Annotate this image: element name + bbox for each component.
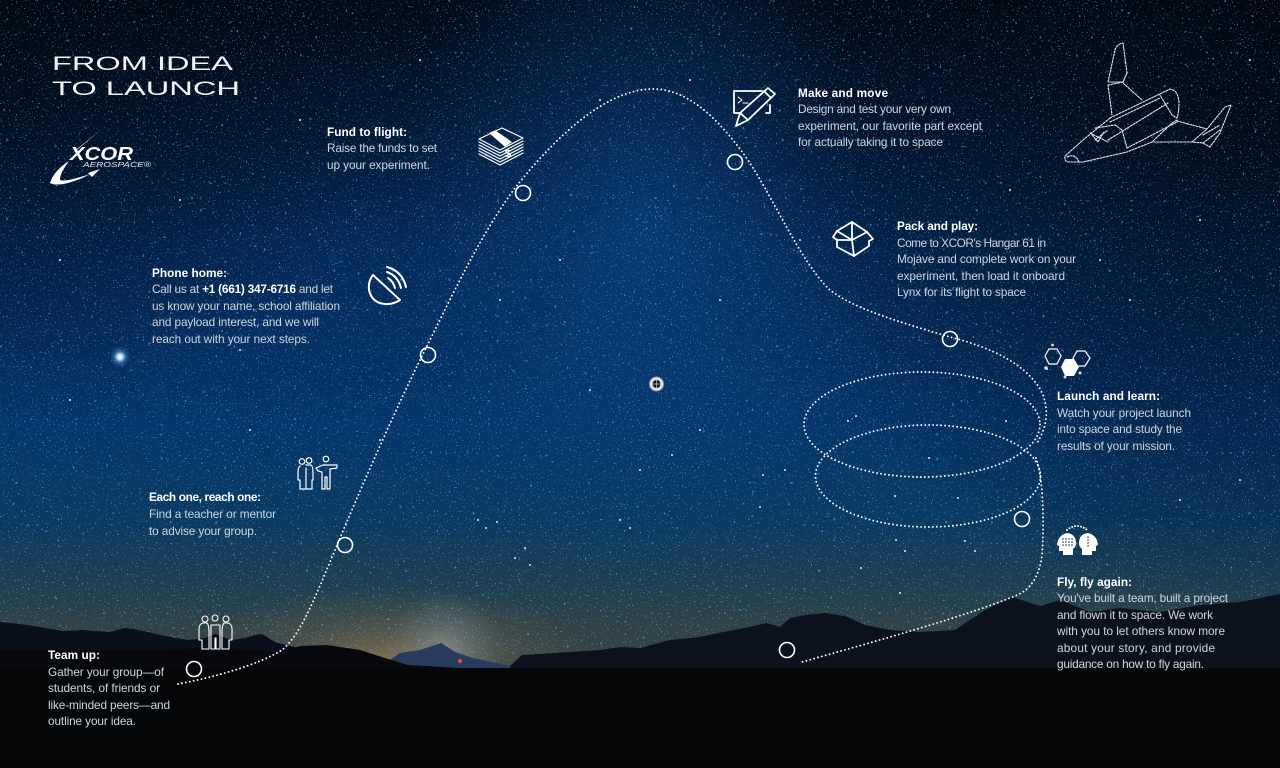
step: make and move	[734, 86, 983, 149]
icon: team	[199, 615, 232, 649]
icon: molecules	[1044, 344, 1090, 378]
icon: satellite dish	[369, 267, 406, 304]
icon: money stack: $	[505, 148, 511, 160]
text	[48, 665, 170, 728]
heading: Pack and play:	[897, 219, 978, 233]
text: about your story, and provide	[1057, 641, 1215, 655]
heading: Each one, reach one:	[149, 490, 261, 504]
step: phone home	[152, 266, 406, 346]
text	[327, 141, 438, 172]
text: Lynx for its flight to space	[897, 285, 1026, 299]
heading: Fund to flight:	[327, 125, 407, 139]
mountains	[0, 594, 1280, 768]
step: team up	[48, 615, 232, 728]
text: Come to XCOR's Hangar 61 in	[897, 236, 1046, 250]
logo: XCOR Aerospace	[50, 128, 152, 185]
text: Raise the funds to set	[327, 141, 438, 155]
heading: Make and move	[798, 86, 888, 100]
step: each one, reach one	[149, 456, 337, 538]
text: experiment, our favorite part except	[798, 119, 983, 133]
text: experiment, then load it onboard	[897, 269, 1065, 283]
step markers	[186, 154, 1030, 676]
step: fund to flight	[327, 125, 523, 172]
text: with you to let others know more	[1056, 624, 1225, 638]
text: results of your mission.	[1057, 439, 1175, 453]
logo: XCOR Aerospace: AEROSPACE®	[82, 161, 152, 169]
text: guidance on how to fly again.	[1057, 657, 1204, 671]
text: Mojave and complete work on your	[897, 252, 1076, 266]
text: reach out with your next steps.	[152, 332, 310, 346]
bright star	[109, 346, 131, 368]
text	[798, 102, 983, 149]
text: Find a teacher or mentor	[149, 507, 276, 521]
text: like-minded peers—and	[48, 698, 170, 712]
icon: two heads	[1057, 526, 1098, 555]
text: Watch your project launch	[1057, 406, 1191, 420]
text: Design and test your very own	[798, 102, 951, 116]
title	[52, 54, 240, 100]
heading: Team up:	[48, 648, 100, 662]
icon: mentor	[298, 456, 337, 489]
icon: money stack	[479, 128, 523, 165]
text: and flown it to space. We work	[1057, 608, 1213, 622]
heading: Phone home:	[152, 266, 227, 280]
flight path	[178, 89, 1046, 684]
text: up your experiment.	[327, 158, 430, 172]
step: fly, fly again	[1056, 526, 1229, 671]
text: to advise your group.	[149, 524, 257, 538]
text: into space and study the	[1057, 422, 1182, 436]
step: pack and play	[833, 219, 1076, 299]
text: outline your idea.	[48, 714, 136, 728]
text: students, of friends or	[48, 681, 160, 695]
text: Call us at +1 (661) 347-6716 and let	[152, 282, 334, 296]
text	[1057, 406, 1191, 453]
text	[149, 507, 276, 538]
center target star	[650, 377, 664, 391]
text	[1056, 591, 1229, 671]
text: for actually taking it to space	[798, 135, 943, 149]
step: launch and learn	[1044, 344, 1191, 453]
spaceship	[1065, 43, 1231, 162]
logo: XCOR Aerospace: XCOR	[69, 144, 133, 164]
icon: pencil and screen	[734, 88, 775, 126]
icon: box	[833, 222, 873, 256]
text: You've built a team, built a project	[1057, 591, 1229, 605]
title: TO LAUNCH	[52, 79, 240, 100]
heading: Fly, fly again:	[1057, 575, 1132, 589]
text: us know your name, school affiliation	[152, 299, 340, 313]
text	[897, 236, 1076, 299]
text: Gather your group—of	[48, 665, 165, 679]
text: and payload interest, and we will	[152, 315, 319, 329]
title: FROM IDEA	[52, 54, 234, 75]
heading: Launch and learn:	[1057, 389, 1160, 403]
text	[152, 282, 340, 346]
